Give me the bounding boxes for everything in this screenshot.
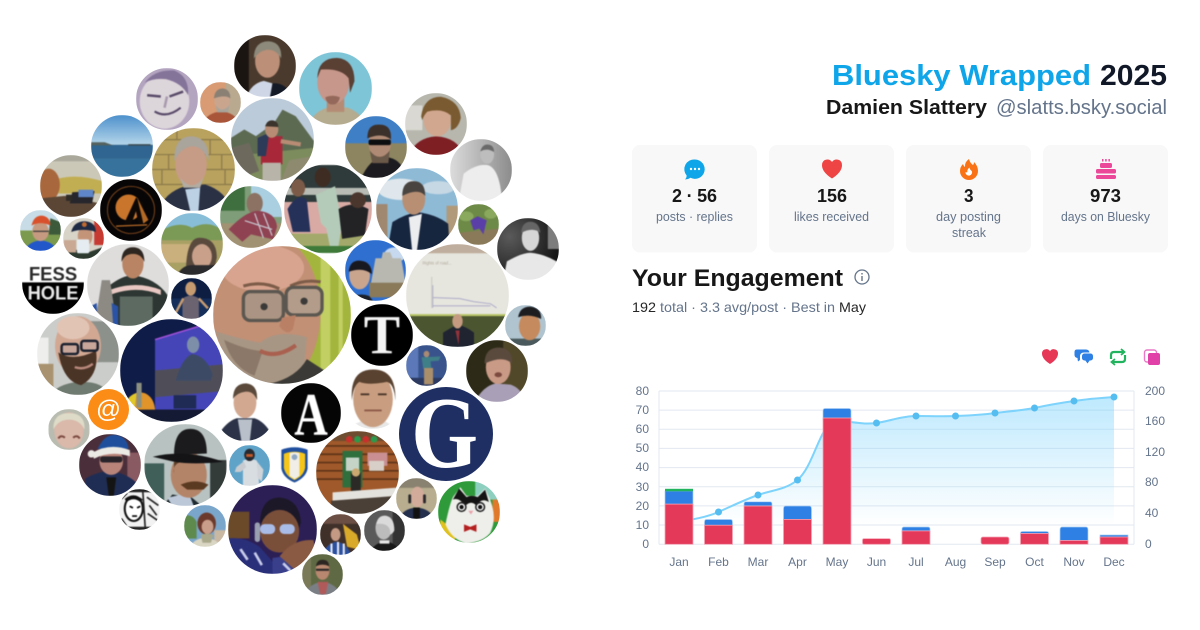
profile name and handle: @slatts.bsky.social (996, 97, 1167, 119)
avatar: 1970s footballers (284, 164, 372, 254)
x axis month labels: Mar (748, 555, 768, 569)
right axis labels: 80 (1145, 475, 1159, 489)
right axis labels: 160 (1145, 414, 1165, 428)
profile name and handle: Damien Slattery (826, 97, 988, 119)
avatar: black and white man in white shirt (450, 139, 512, 201)
avatar: conference stage (120, 319, 223, 422)
x axis month labels: Jan (669, 555, 689, 569)
avatar: ink sketch (119, 489, 160, 530)
left axis labels: 0 (642, 537, 649, 551)
panel: avatar bubble cluster (20, 35, 559, 595)
x axis month labels: Sep (984, 555, 1006, 569)
avatar: selfie with crowd (505, 305, 546, 346)
engagement summary: 192 (632, 299, 656, 315)
avatar: man with trophy (87, 244, 169, 326)
avatar: sepia drawing of smiling man (136, 68, 198, 130)
avatar: referee and player in blue-white (320, 514, 361, 555)
right axis labels: 120 (1145, 445, 1165, 459)
stacked bars: replies (665, 408, 1128, 543)
chart: monthly engagement (636, 384, 1165, 569)
avatar: Fess Hole logo: HOLE (28, 283, 78, 305)
stat card: likes: 156 (817, 186, 847, 206)
stat card: posts and replies: posts · replies (656, 210, 733, 224)
title: Bluesky Wrapped (832, 60, 1091, 92)
stat card: days on Bluesky: 973 (1090, 186, 1121, 206)
heading: your engagement: Your Engagement (632, 265, 843, 292)
avatar: lego log cabin (316, 431, 399, 514)
avatar: sea view (91, 115, 153, 177)
avatar: man in dark room (234, 35, 296, 97)
engagement summary: total · 3.3 avg/post · Best in (660, 299, 835, 315)
avatar: man with bookshelf (200, 82, 241, 123)
avatar: Fess Hole logo (22, 264, 84, 314)
avatar: radio commentator (396, 478, 437, 519)
avatar: cartoon cat (438, 481, 500, 543)
avatar: Fess Hole logo: FESS (29, 264, 77, 286)
stat card: days on Bluesky: days on Bluesky (1061, 210, 1151, 224)
icon: flame (960, 159, 978, 180)
right axis labels: 40 (1145, 506, 1159, 520)
stat card: likes (769, 145, 894, 252)
avatar: black and white Leeds player (497, 218, 559, 280)
avatar: man in sunglasses (345, 116, 407, 178)
avatar: main selfie with glasses (213, 246, 351, 384)
avatar: curly-haired man (405, 93, 467, 155)
cumulative line (679, 397, 1114, 522)
avatar: New York Times logo (351, 304, 413, 366)
x axis month labels: Nov (1063, 555, 1085, 569)
avatar: person in fur hat (161, 213, 223, 275)
stacked bars: likes (665, 418, 1128, 544)
stat card: posts and replies: 2 · 56 (672, 186, 717, 206)
engagement summary: May (839, 299, 866, 315)
x axis month labels: Aug (945, 555, 966, 569)
avatar: man with red scarf (302, 554, 343, 595)
avatar: astronaut (229, 445, 270, 486)
left axis labels: 40 (636, 460, 649, 474)
stat card: streak (906, 145, 1031, 252)
avatar: boy with Japanese castle (345, 240, 406, 301)
left axis labels: 10 (636, 518, 649, 532)
avatar: bald bearded man with glasses (37, 313, 119, 395)
right axis labels: 200 (1145, 384, 1165, 398)
avatar: man in red cap (20, 210, 61, 251)
avatar: smiling man in blazer on white (215, 381, 275, 441)
avatar: Leeds United badge (280, 446, 308, 484)
left axis labels: 60 (636, 422, 649, 436)
avatar: presentation slide with speaker (406, 244, 509, 347)
x axis month labels (669, 555, 1125, 569)
left axis labels: 80 (636, 384, 649, 398)
avatar: desk with laptop (40, 155, 102, 217)
x axis month labels: May (826, 555, 848, 569)
avatar: smiling man in suit (376, 168, 458, 250)
title: 2025 (1100, 60, 1167, 92)
icon: info (855, 270, 869, 284)
avatar: man speaking (466, 340, 528, 402)
avatar: pale man close-up (48, 409, 90, 450)
avatar: New York Times logo: T (364, 305, 400, 366)
x axis month labels: Dec (1103, 555, 1125, 569)
left axis labels (636, 384, 649, 551)
avatar: black-figure vase (100, 179, 162, 241)
left axis labels: 20 (636, 499, 649, 513)
icon: reposts (1111, 349, 1125, 365)
left axis labels: 30 (636, 480, 649, 494)
icon: birthday cake (1096, 159, 1116, 179)
avatar: man with headphones (228, 485, 317, 574)
avatar: presentation slide with speaker: Rights of road... (422, 261, 451, 266)
stat card: streak: streak (952, 226, 987, 240)
x axis month labels: Oct (1025, 555, 1044, 569)
avatar: orange at-sign: @ (96, 397, 121, 424)
x axis month labels: Jul (908, 555, 924, 569)
avatar: man against brick wall (152, 128, 235, 211)
avatar: small figure on navy (171, 278, 212, 319)
icon: replies (1074, 350, 1093, 364)
x axis month labels: Apr (788, 555, 807, 569)
icon: speech bubble (684, 159, 705, 179)
avatar: speaker on blue stage (406, 345, 447, 386)
stat card: likes: likes received (794, 210, 869, 224)
avatar: head cut-out on white (350, 368, 396, 429)
stacked bars: reposts (665, 489, 693, 491)
right axis labels: 0 (1145, 537, 1152, 551)
icon: quotes (1144, 350, 1160, 365)
cumulative points (715, 394, 1118, 516)
x axis month labels: Feb (708, 555, 729, 569)
icon: likes (1042, 349, 1058, 364)
cumulative area (679, 397, 1114, 525)
x axis month labels: Jun (867, 555, 886, 569)
icon: heart (822, 159, 842, 178)
avatar: orange at-sign (88, 389, 129, 430)
avatar: man on blue wall (299, 52, 372, 125)
avatar: man at Machu Picchu (231, 98, 314, 181)
avatar: purple flower (458, 204, 499, 245)
avatar: black and white old portrait (364, 510, 405, 551)
avatar: man in plaid shirt (220, 186, 282, 248)
avatar: man in Santa hat (79, 434, 141, 496)
profile name and handle (826, 97, 1167, 119)
chart legend icons (1042, 349, 1160, 365)
stat card: streak: day posting (936, 210, 1001, 224)
stat card: streak: 3 (964, 186, 974, 206)
gridlines (659, 391, 1134, 544)
avatar: man in bowler hat (144, 424, 227, 506)
avatar: man in navy cap with mug (63, 218, 104, 259)
stat card: posts and replies (632, 145, 757, 252)
stat card: days on Bluesky (1043, 145, 1168, 252)
right axis labels (1145, 384, 1165, 551)
left axis labels: 70 (636, 403, 649, 417)
left axis labels: 50 (636, 441, 649, 455)
avatar: woman with scarf (184, 505, 226, 547)
